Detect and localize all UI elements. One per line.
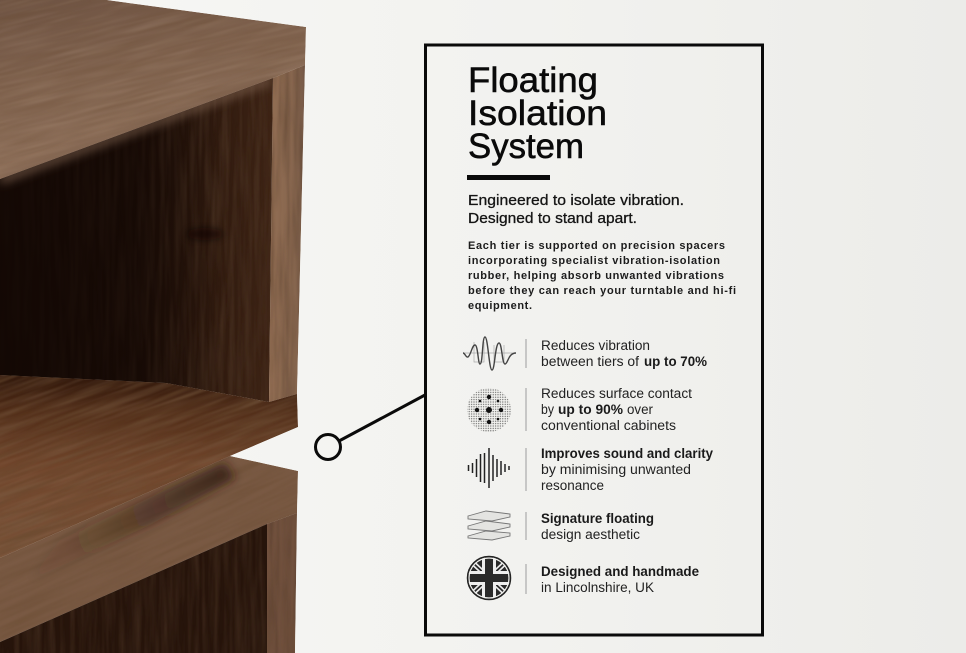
lower tier: dark back wall: [0, 520, 270, 653]
label: [541, 338, 707, 369]
label: by: [541, 402, 554, 417]
title: Floating: [468, 61, 598, 100]
label: Reduces surface contact: [541, 386, 692, 401]
label: Improves sound and clarity: [541, 446, 713, 461]
body text: Each tier is supported on precision spacers: [468, 240, 725, 252]
label: conventional cabinets: [541, 418, 676, 433]
upper tier: soft front edge of slab: [0, 80, 270, 180]
divider: [525, 448, 527, 491]
title rule: [467, 175, 550, 180]
label: up to 70%: [644, 354, 707, 369]
panel: floating isolation system: [426, 45, 762, 635]
body text: [468, 240, 736, 312]
icon: stacked layers: [468, 511, 510, 540]
label: by minimising unwanted: [541, 462, 691, 477]
label: between tiers of: [541, 354, 639, 369]
label: Designed and handmade: [541, 564, 699, 579]
label: [541, 446, 713, 493]
title: Isolation: [468, 94, 607, 133]
panel border: [426, 45, 762, 635]
wooden cabinet photograph: [0, 0, 306, 653]
label: resonance: [541, 478, 604, 493]
lower tier: side post: [267, 513, 297, 653]
body text: before they can reach your turntable and hi-fi: [468, 285, 736, 297]
lower tier: top slab: [0, 456, 298, 642]
feature: floating design: [468, 511, 654, 542]
label: Reduces vibration: [541, 338, 650, 353]
title: [468, 61, 607, 166]
feature: made in UK: [468, 556, 699, 600]
subheading: Engineered to isolate vibration.: [468, 192, 684, 209]
icon: waveform: [463, 337, 516, 370]
subheading: Designed to stand apart.: [468, 210, 637, 227]
body text: equipment.: [468, 300, 532, 312]
feature: surface contact: [467, 386, 692, 433]
icon: union flag roundel: [468, 556, 510, 600]
label: Signature floating: [541, 511, 654, 526]
label: [541, 386, 692, 433]
label: up to 90%: [558, 402, 623, 417]
body text: incorporating specialist vibration-isolation: [468, 255, 720, 267]
divider: [525, 339, 527, 368]
divider: [525, 512, 527, 540]
upper tier: shelf floor: [0, 375, 298, 558]
upper tier: side post: [269, 65, 305, 402]
upper tier: top slab: [0, 0, 306, 179]
label: over: [627, 402, 653, 417]
icon: halftone contact dots: [467, 388, 511, 432]
title: System: [468, 127, 584, 166]
label: [541, 564, 699, 595]
body text: rubber, helping absorb unwanted vibrations: [468, 270, 724, 282]
label: in Lincolnshire, UK: [541, 580, 654, 595]
label: [541, 511, 654, 542]
divider: [525, 564, 527, 594]
icon: sound bars: [468, 448, 509, 488]
feature: vibration reduction: [463, 337, 707, 370]
subheading: [468, 192, 684, 227]
divider: [525, 388, 527, 431]
feature: sound and clarity: [468, 446, 713, 493]
label: design aesthetic: [541, 527, 640, 542]
upper tier: dark back wall: [0, 70, 275, 405]
callout connector: ring and line: [316, 395, 425, 460]
